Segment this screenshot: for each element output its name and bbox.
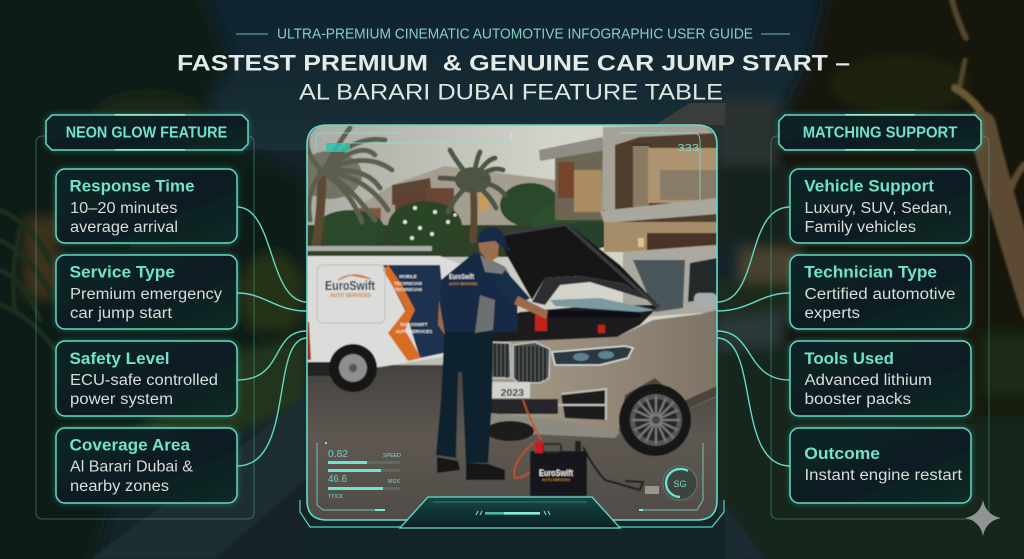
scene: technician	[436, 227, 548, 480]
scene: palm trees	[298, 128, 505, 245]
scene: paving	[307, 365, 717, 525]
card: coverage area: Coverage Area	[70, 437, 191, 455]
card: vehicle support: Vehicle Support	[804, 178, 935, 196]
scene: service van: EUROSWIFT	[400, 322, 428, 327]
card: technician type: Technician Type	[804, 264, 937, 282]
card: response time	[56, 169, 237, 243]
scene: service van: AUTO SERVICES	[396, 329, 432, 334]
card: technician type: experts	[804, 305, 860, 322]
card: tools used	[790, 341, 971, 416]
card: vehicle support: Family vehicles	[804, 219, 916, 236]
card: vehicle support: Luxury, SUV, Sedan,	[804, 200, 952, 217]
card: vehicle support	[790, 169, 971, 243]
card: technician type: Certified automotive	[804, 286, 956, 303]
subtitle: ULTRA-PREMIUM CINEMATIC AUTOMOTIVE INFOGRAPHIC USER GUIDE	[277, 26, 753, 42]
right column heading	[779, 114, 981, 151]
card: tools used: Tools Used	[804, 350, 894, 368]
card: outcome	[790, 428, 971, 503]
card: outcome: Outcome	[804, 445, 880, 463]
card: service type: car jump start	[70, 305, 173, 322]
card: service type	[56, 255, 237, 329]
card: response time: average arrival	[70, 219, 178, 236]
card: safety level: ECU-safe controlled	[70, 372, 218, 389]
card: service type: Premium emergency	[70, 286, 222, 303]
card: response time: 10–20 minutes	[70, 200, 178, 217]
left column outline	[36, 136, 254, 519]
scene: battery booster and cables: AUTO SERVICES	[542, 478, 571, 482]
card: coverage area	[56, 428, 237, 503]
card: coverage area: Al Barari Dubai &	[70, 459, 194, 476]
scene: service van: TECHNICIAN	[394, 287, 422, 292]
hud: speed bars: 0.82	[328, 449, 348, 460]
card: tools used: booster packs	[804, 391, 911, 408]
frame base trapezoid	[400, 497, 620, 528]
central photo: technician jump starting SUV	[298, 124, 717, 525]
scene: greenery and shrubs	[307, 183, 620, 257]
right column heading: MATCHING SUPPORT	[803, 124, 958, 141]
title line 2: AL BARARI DUBAI FEATURE TABLE	[299, 79, 723, 104]
hud: top tag and readout: 333	[678, 142, 699, 154]
scene: silver SUV	[486, 245, 717, 456]
card: tools used: Advanced lithium	[804, 372, 932, 389]
card: safety level: power system	[70, 391, 173, 408]
scene: silver SUV: 2023	[501, 387, 524, 399]
left column heading	[46, 114, 248, 151]
hud: top tag and readout	[316, 133, 700, 200]
card: outcome: Instant engine restart	[804, 467, 963, 484]
scene: raised bonnet	[500, 223, 660, 333]
right column outline	[771, 136, 989, 519]
hud: circular gauge	[639, 443, 703, 511]
central frame with chamfered base	[300, 125, 724, 528]
connector lines	[237, 207, 790, 466]
scene: service van: TECHNICIAN	[394, 281, 422, 286]
scene: technician: EuroSwift	[449, 274, 475, 281]
card: safety level	[56, 341, 237, 416]
hud: speed bars: SPEED	[383, 453, 401, 459]
panel: matching support column	[771, 114, 989, 519]
card: safety level: Safety Level	[70, 350, 170, 368]
hud: speed bars: 46.6	[328, 474, 347, 485]
scene: service van: AUTO SERVICES	[330, 293, 371, 299]
scene: modern villa	[539, 124, 717, 252]
card: service type: Service Type	[70, 264, 175, 282]
title line 1: FASTEST PREMIUM & GENUINE CAR JUMP START –	[177, 50, 850, 76]
card: response time: Response Time	[70, 178, 194, 196]
card: technician type	[790, 255, 971, 329]
scene: technician: AUTO SERVICES	[449, 282, 478, 286]
hud: speed bars: MDX	[388, 479, 400, 485]
scene: battery booster and cables	[514, 400, 643, 496]
scene: left villa	[358, 166, 556, 226]
scene: service van: MOBILE	[399, 274, 417, 279]
scene: service van: EuroSwift	[325, 279, 376, 293]
icon: sparkle	[965, 500, 1001, 536]
card: coverage area: nearby zones	[70, 478, 169, 495]
hud: circular gauge: SG	[673, 479, 687, 489]
scene: service van	[308, 245, 460, 392]
panel: neon glow feature column	[36, 114, 254, 519]
left column heading: NEON GLOW FEATURE	[66, 124, 227, 141]
hud: speed bars: TTICK	[328, 494, 343, 500]
scene: battery booster and cables: EuroSwift	[539, 468, 573, 478]
hud: speed bars	[317, 442, 401, 511]
